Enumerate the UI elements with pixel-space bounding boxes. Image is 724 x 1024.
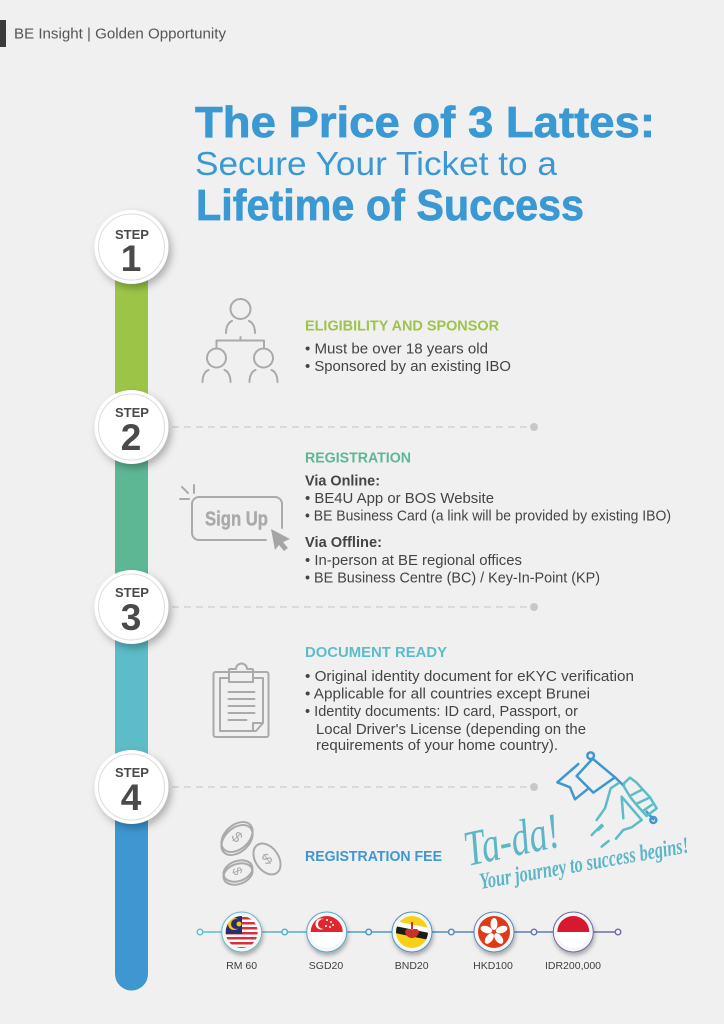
document ready text bbox=[305, 645, 634, 754]
registration text: Via Online: bbox=[305, 474, 380, 490]
flag: Indonesia bbox=[553, 912, 593, 952]
currency labels: BND20 bbox=[395, 960, 429, 972]
currency labels: IDR200,000 bbox=[545, 960, 601, 972]
icon: hand with flag bbox=[557, 752, 657, 847]
header tag: BE Insight | Golden Opportunity bbox=[14, 26, 227, 42]
flag: Malaysia bbox=[222, 912, 262, 952]
timeline bar bbox=[115, 280, 148, 990]
icon: coins: $ bbox=[259, 850, 276, 869]
step 4 badge: 4 bbox=[121, 777, 142, 818]
step 2 badge: 2 bbox=[121, 417, 141, 458]
step 1 badge: STEP bbox=[115, 227, 149, 242]
eligibility text: ELIGIBILITY AND SPONSOR bbox=[305, 318, 500, 334]
registration text: • BE Business Centre (BC) / Key-In-Point (KP) bbox=[305, 570, 600, 586]
icon: clipboard bbox=[214, 664, 268, 737]
eligibility text: • Sponsored by an existing IBO bbox=[305, 359, 511, 375]
title: Lifetime of Success bbox=[196, 181, 584, 230]
step 2 badge: STEP bbox=[115, 405, 149, 420]
document ready text: Local Driver's License (depending on the bbox=[316, 722, 586, 738]
step 1 badge: 1 bbox=[121, 238, 141, 279]
title: The Price of 3 Lattes: bbox=[195, 98, 655, 147]
registration text: REGISTRATION bbox=[305, 450, 411, 466]
divider: step 3 bbox=[172, 603, 538, 611]
step 3 badge: STEP bbox=[115, 585, 149, 600]
registration text: • In-person at BE regional offices bbox=[305, 553, 522, 569]
step 4 badge bbox=[94, 750, 168, 824]
flag: Brunei bbox=[392, 912, 432, 952]
icon: coins bbox=[216, 816, 286, 889]
title bbox=[195, 98, 655, 230]
document ready text: • Original identity document for eKYC verification bbox=[305, 669, 634, 685]
title: Secure Your Ticket to a bbox=[195, 145, 558, 182]
header tag bbox=[0, 20, 227, 47]
document ready text: • Identity documents: ID card, Passport, or bbox=[305, 704, 578, 720]
currency labels bbox=[226, 960, 601, 972]
script: ta-da: Ta-da! bbox=[459, 802, 564, 877]
divider: step 4 bbox=[172, 783, 538, 791]
icon: sign up button: Sign Up bbox=[205, 508, 268, 530]
divider: step 2 bbox=[172, 423, 538, 431]
currency labels: HKD100 bbox=[473, 960, 513, 972]
flag: Hong Kong bbox=[474, 912, 514, 952]
document ready text: requirements of your home country). bbox=[316, 738, 558, 754]
registration text bbox=[305, 450, 671, 586]
flag: Singapore bbox=[307, 912, 347, 952]
document ready text: DOCUMENT READY bbox=[305, 645, 447, 661]
currency timeline bbox=[197, 912, 621, 972]
step 3 badge: 3 bbox=[121, 597, 141, 638]
currency labels: RM 60 bbox=[226, 960, 257, 972]
registration fee heading: REGISTRATION FEE bbox=[305, 849, 442, 865]
icon: sign up button bbox=[180, 485, 290, 551]
step 3 badge bbox=[94, 570, 168, 644]
icon: coins: $ bbox=[229, 865, 246, 878]
registration text: • BE4U App or BOS Website bbox=[305, 491, 494, 507]
icon: coins: $ bbox=[228, 829, 246, 847]
step 1 badge bbox=[94, 210, 168, 284]
eligibility text: • Must be over 18 years old bbox=[305, 342, 488, 358]
step 4 badge: STEP bbox=[115, 765, 149, 780]
eligibility text bbox=[305, 318, 511, 375]
currency labels: SGD20 bbox=[309, 960, 343, 972]
registration text: Via Offline: bbox=[305, 535, 382, 551]
registration text: • BE Business Card (a link will be provided by existing IBO) bbox=[305, 508, 671, 524]
document ready text: • Applicable for all countries except Brunei bbox=[305, 686, 590, 702]
icon: sponsor hierarchy bbox=[202, 299, 278, 382]
step 2 badge bbox=[94, 390, 168, 464]
